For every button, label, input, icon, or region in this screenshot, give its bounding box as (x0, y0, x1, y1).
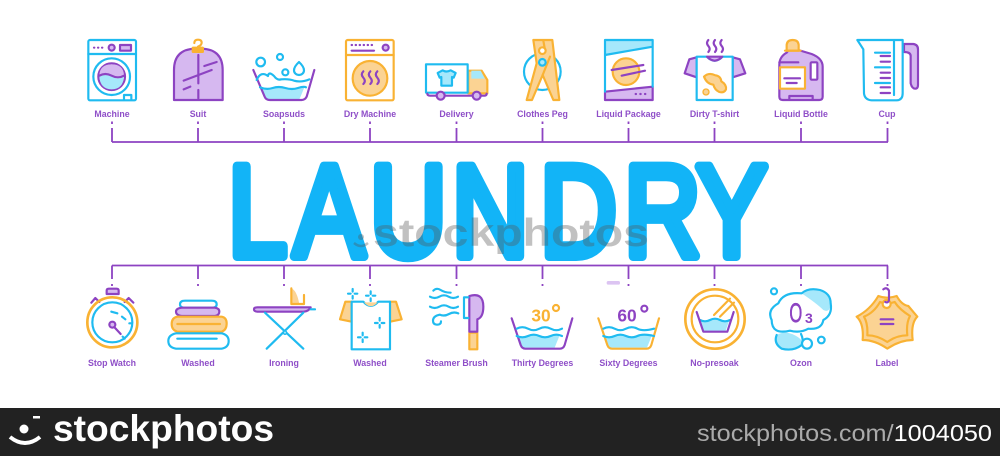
top row labels: Dry Machine (344, 109, 396, 119)
bottom connector line (112, 266, 888, 286)
icon: no presoak (685, 289, 745, 349)
icon: ozone bubbles (770, 288, 831, 350)
top row labels: Liquid Package (596, 109, 661, 119)
top row labels: Delivery (439, 109, 474, 119)
bottom row labels: Steamer Brush (425, 358, 488, 368)
icon: ozone bubbles: O (789, 298, 802, 328)
icon: thirty degrees: 30 (531, 305, 551, 325)
icon: thirty degrees (512, 305, 572, 349)
top row labels: Cup (878, 109, 896, 119)
icon: sixty degrees (598, 281, 659, 349)
top row labels: Soapsuds (263, 109, 305, 119)
icon: clean t-shirt (340, 289, 402, 349)
top row labels: Dirty T-shirt (690, 109, 739, 119)
icon: clothes peg (524, 40, 561, 100)
bottom row icons (87, 288, 483, 349)
bottom row labels: Stop Watch (88, 358, 136, 368)
logo mark (10, 416, 40, 443)
bottom row labels: Ozon (790, 358, 812, 368)
icon: steamer brush (430, 289, 483, 349)
footer bar (0, 408, 1000, 456)
logo wordmark: stockphotos (53, 408, 274, 449)
icon: sixty degrees: 60 (617, 306, 637, 326)
top row labels (94, 109, 896, 119)
icon: stop watch (87, 289, 137, 347)
icon: ozone bubbles: 3 (805, 310, 813, 326)
icon: suit cover (174, 40, 223, 100)
icon: stacked laundry (168, 301, 229, 349)
top row labels: Suit (190, 109, 206, 119)
icon: measuring cup (857, 40, 918, 100)
bottom row labels: Thirty Degrees (512, 358, 573, 368)
icon: star label (857, 288, 917, 349)
top row icons (88, 40, 487, 100)
icon: ironing board (254, 288, 315, 349)
top row labels: Liquid Bottle (774, 109, 828, 119)
top connector line (112, 122, 888, 142)
icon: washing machine (88, 40, 136, 100)
bottom row labels (88, 358, 898, 368)
bottom row labels: Sixty Degrees (599, 358, 658, 368)
top row labels: Machine (94, 109, 130, 119)
bottom row labels: Washed (353, 358, 387, 368)
image id: stockphotos.com/ 1004050 (697, 420, 992, 446)
bottom row labels: Label (876, 358, 898, 368)
icon: dirty t-shirt (685, 40, 745, 100)
top row labels: Clothes Peg (517, 109, 568, 119)
bottom row labels: Ironing (269, 358, 299, 368)
bottom row labels: No-presoak (690, 358, 739, 368)
title: LAUNDRY (228, 139, 767, 284)
icon: liquid bottle (779, 40, 823, 100)
icon: delivery truck (426, 64, 487, 100)
watermark: stockphotos (373, 212, 649, 255)
icon: soapsuds basin (253, 54, 314, 100)
icon: dry machine (346, 40, 394, 100)
bottom row labels: Washed (181, 358, 215, 368)
icon: liquid package (605, 40, 653, 100)
